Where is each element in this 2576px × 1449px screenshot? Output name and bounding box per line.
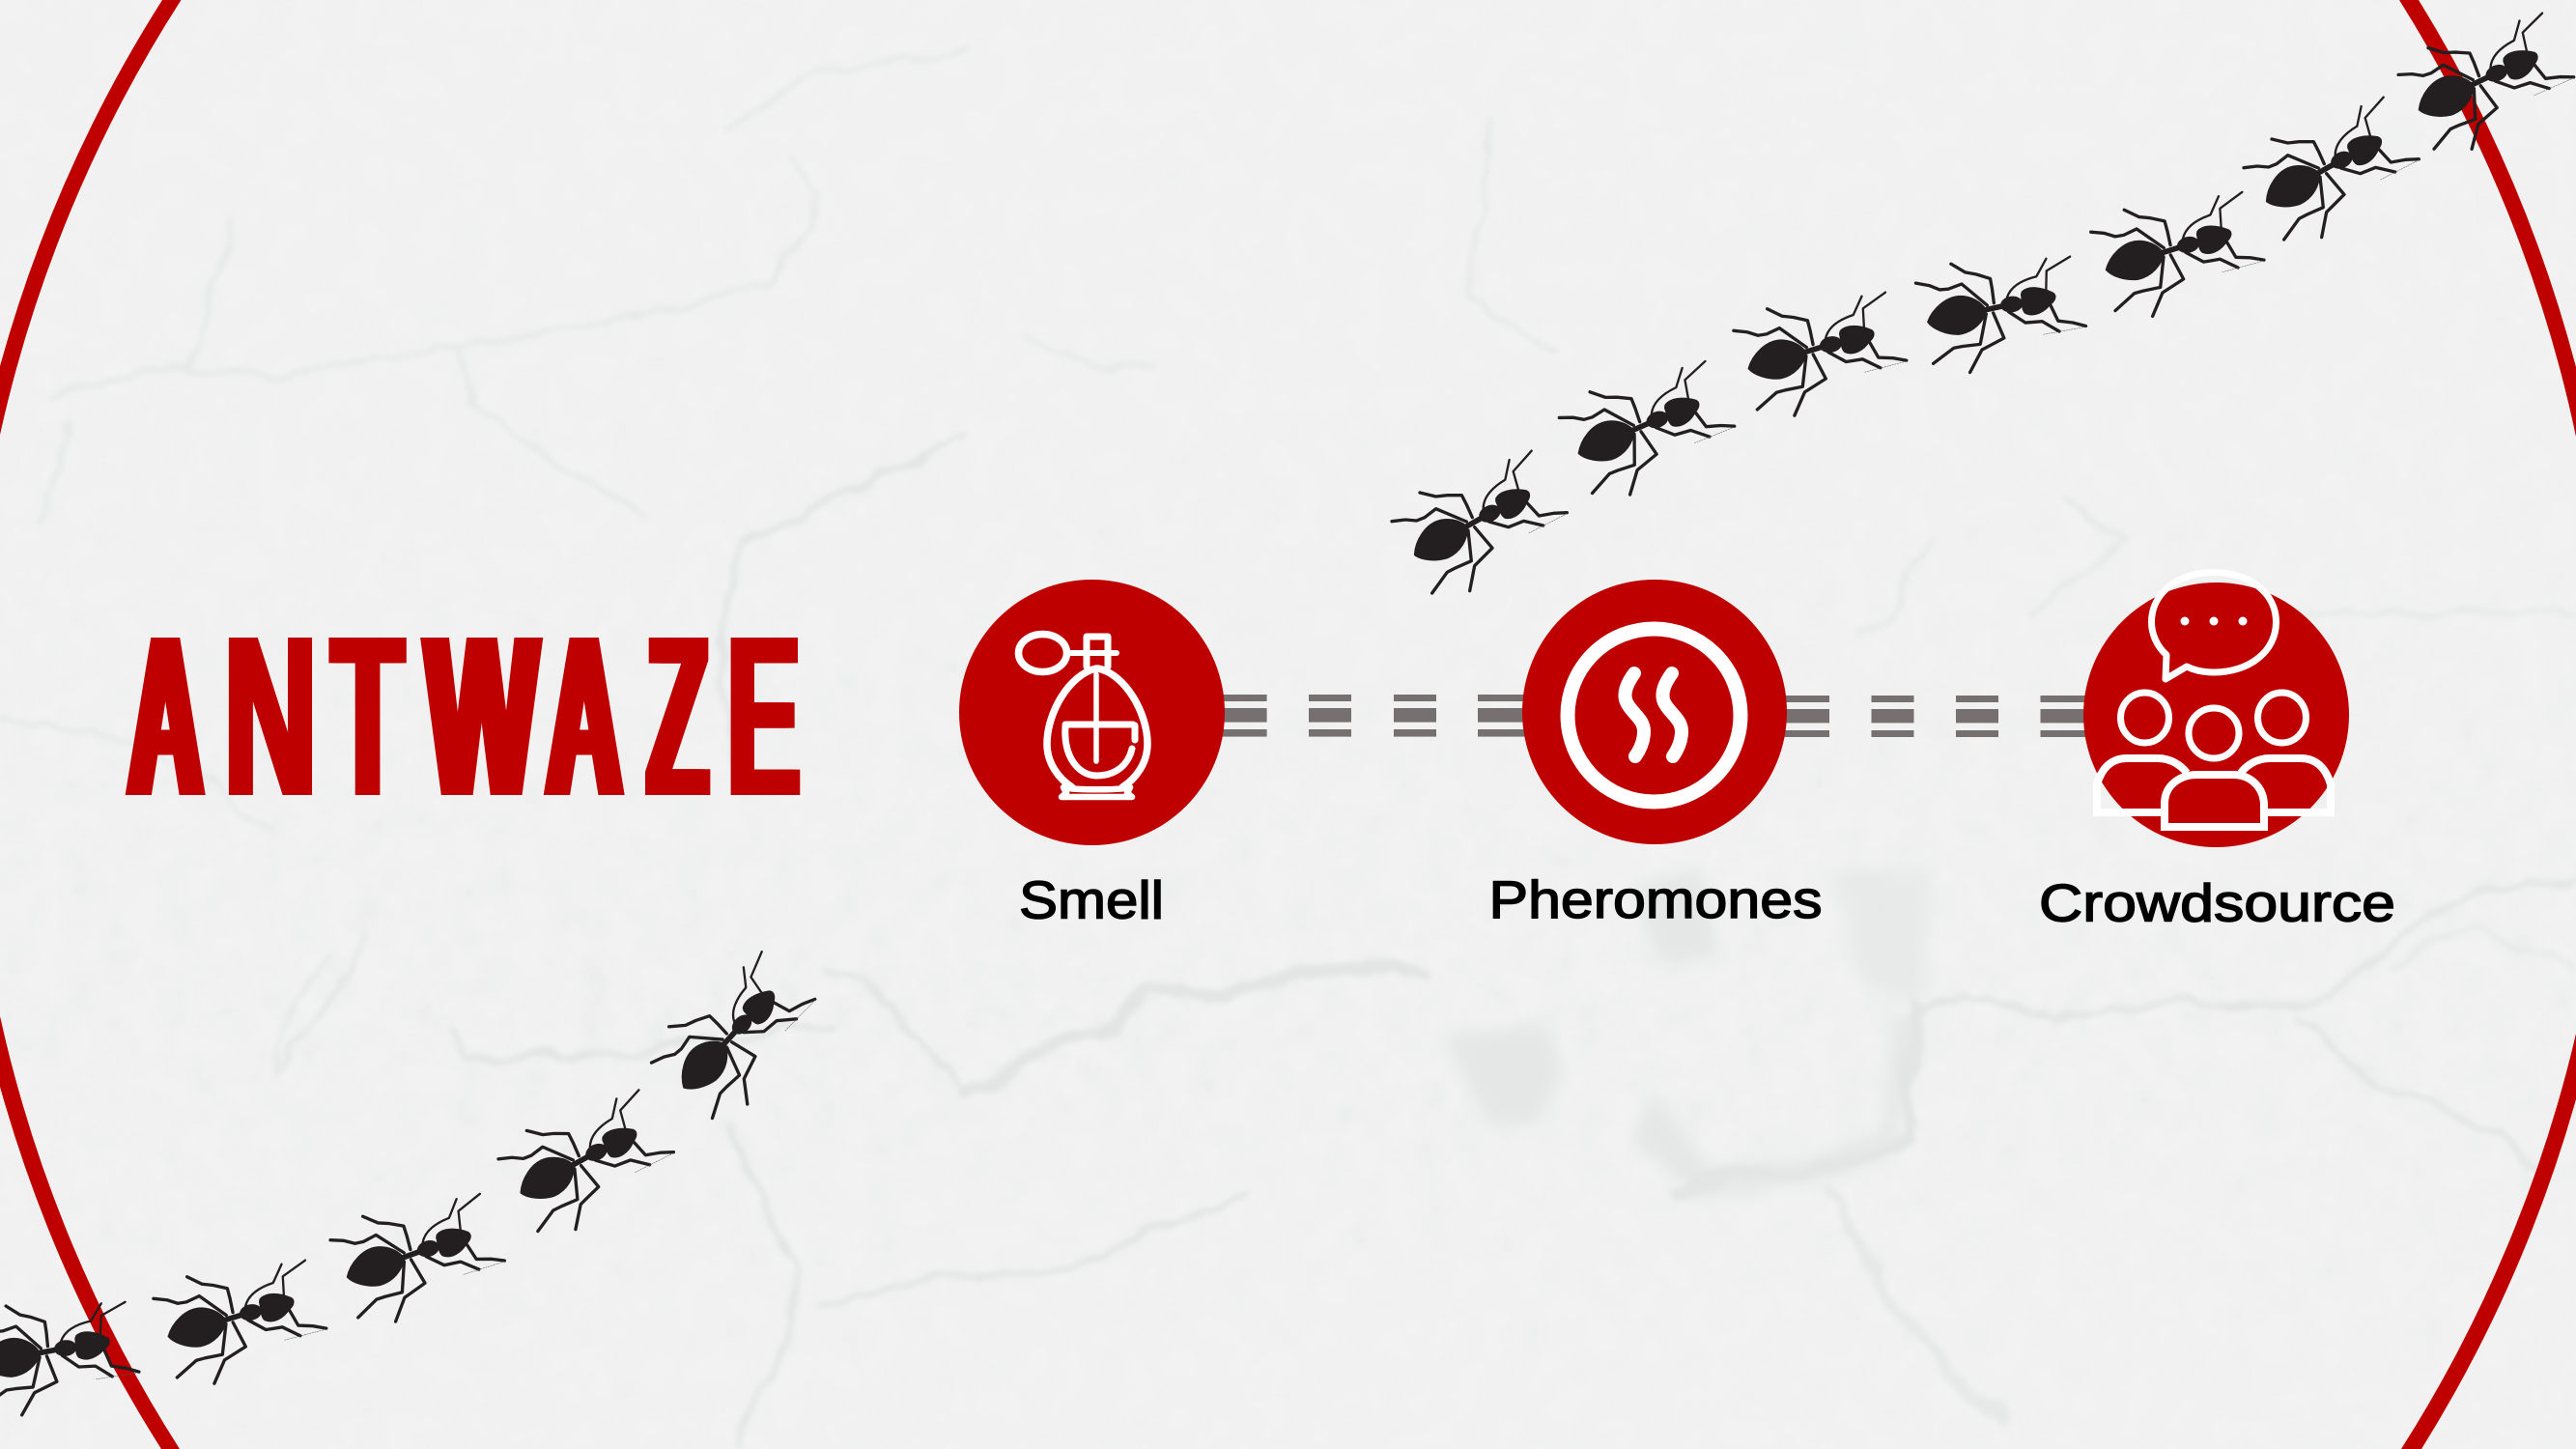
ant 5 <box>2076 163 2277 339</box>
connector: smell to pheromones <box>1217 695 1526 737</box>
circle: crowdsource <box>2083 582 2349 847</box>
ant 9 <box>497 1089 674 1233</box>
ant 7 <box>2393 5 2576 157</box>
connector: pheromones to crowdsource <box>1779 696 2088 737</box>
title: A <box>547 588 621 844</box>
ant 3 <box>1718 262 1920 439</box>
title: Z <box>648 588 707 844</box>
title <box>126 588 801 844</box>
ant 8 <box>629 941 840 1131</box>
circle: smell <box>959 580 1225 845</box>
title: E <box>727 588 801 844</box>
node: smell <box>959 580 1225 929</box>
title: A <box>128 588 203 844</box>
node: crowdsource <box>2039 572 2395 933</box>
icon: crowd with speech bubble <box>2097 572 2331 827</box>
ant 4 <box>1895 215 2104 403</box>
title: T <box>330 588 404 844</box>
ant 1 <box>1392 451 1567 593</box>
icon: perfume bottle <box>1018 634 1147 797</box>
icon: steam in ring <box>1568 629 1741 802</box>
ant 6 <box>2244 98 2419 240</box>
title: N <box>224 588 317 844</box>
ant 2 <box>1552 348 1741 506</box>
ant 11 <box>138 1230 340 1406</box>
label: pheromones: Pheromones <box>1489 869 1822 929</box>
ant trail: lower left <box>0 941 840 1448</box>
ant trail: upper right <box>1392 5 2576 593</box>
circle: pheromones <box>1522 580 1787 844</box>
ant 12 <box>0 1258 158 1448</box>
ant 10 <box>319 1171 515 1340</box>
label: crowdsource: Crowdsource <box>2039 873 2395 933</box>
node: pheromones <box>1489 580 1822 929</box>
title: W <box>426 588 537 844</box>
label: smell: Smell <box>1019 869 1164 929</box>
